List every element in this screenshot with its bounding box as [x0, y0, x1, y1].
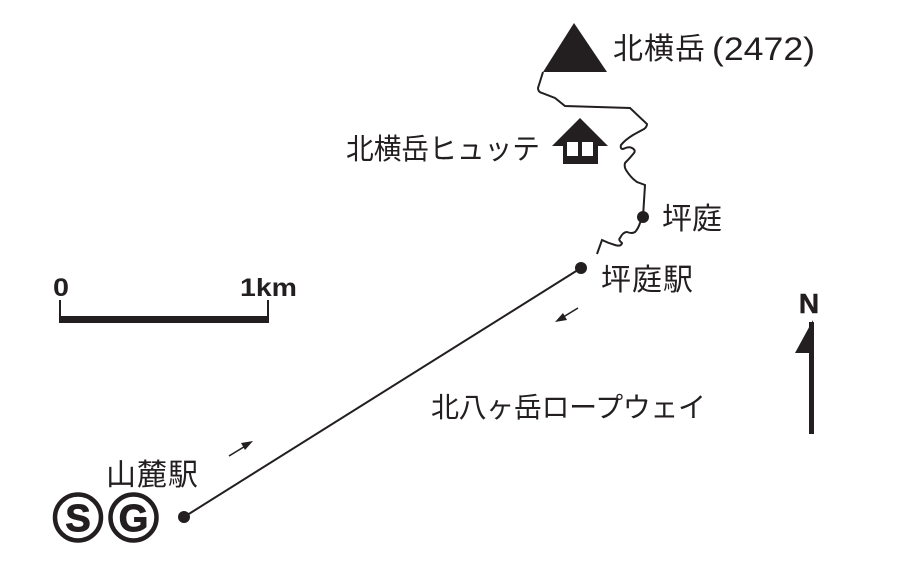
ropeway line: [184, 268, 581, 517]
trail from ropeway station to Tsuboniwa: [597, 217, 643, 254]
hiking trail from hut to summit: [538, 72, 647, 217]
label: ropeway name: 北八ヶ岳ロープウェイ: [431, 392, 706, 423]
icon: start marker: [55, 494, 101, 540]
north arrow: [795, 288, 819, 434]
icon: mountain hut: [552, 118, 608, 164]
waypoint: base station: [178, 511, 190, 523]
arrow: uphill direction: [229, 441, 253, 456]
label: summit name: (2472): [712, 31, 815, 67]
label: summit name: [613, 31, 815, 67]
waypoint: Tsuboniwa station: [575, 262, 587, 274]
north arrow: N: [799, 288, 819, 319]
label: summit name: 北横岳: [613, 33, 705, 66]
label: base station: 山麓駅: [106, 459, 198, 492]
scale bar: [53, 274, 297, 323]
scale bar: 0: [53, 274, 69, 302]
icon: start marker: S: [65, 498, 91, 540]
icon: mountain summit: [543, 23, 607, 72]
icon: goal marker: [110, 494, 156, 540]
waypoint: Tsuboniwa: [637, 211, 649, 223]
label: hut name: 北横岳ヒュッテ: [346, 133, 540, 166]
arrow: downhill direction: [555, 308, 578, 322]
label: Tsuboniwa: 坪庭: [662, 203, 722, 236]
label: Tsuboniwa station: 坪庭駅: [601, 264, 693, 297]
icon: goal marker: G: [119, 498, 148, 540]
scale bar: 1km: [240, 274, 297, 302]
